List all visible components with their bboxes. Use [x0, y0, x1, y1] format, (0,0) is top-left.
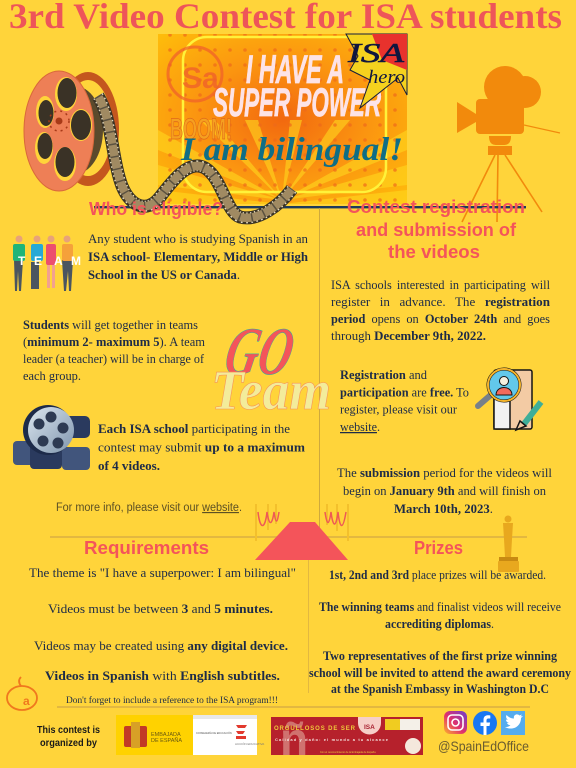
text: requirements: Videos may be created using any digital device.	[34, 638, 288, 653]
logo: embassy of Spain: ACCIÓN EDUCATIVA	[235, 741, 264, 746]
banner headline: SUPER POWER	[213, 81, 381, 125]
text: prizes: The winning teams and finalist videos will receive	[319, 600, 561, 614]
text: requirements: Videos in Spanish with English subtitles.	[45, 668, 280, 683]
logo: proud to be ISA	[271, 713, 423, 765]
text: prizes: 1st, 2nd and 3rd place prizes will be awarded.	[329, 568, 546, 582]
banner headline	[213, 48, 381, 125]
heading: requirements: Requirements	[84, 537, 209, 558]
text: organizers	[37, 725, 100, 749]
banner headline: I HAVE A	[246, 48, 344, 92]
text: teams: (minimum 2- maximum 5). A team	[23, 335, 205, 349]
text: registration period: register in advance. The registration	[331, 295, 550, 309]
banner subtitle: I am bilingual!	[180, 132, 403, 168]
text: submission limit	[98, 421, 305, 473]
heading: contest registration	[347, 196, 525, 262]
text: requirements: The theme is "I have a superpower: I am bilingual"	[29, 565, 296, 580]
text: more info: For more info, please visit our website.	[56, 502, 242, 514]
icon: team: T	[18, 254, 26, 268]
divider: column	[319, 208, 320, 537]
heading: contest registration: Contest registration	[347, 196, 525, 217]
text: submission limit: of 4 videos.	[98, 458, 160, 473]
ISA hero badge	[346, 34, 407, 108]
text: prizes: Two representatives of the first prize winning	[323, 649, 558, 663]
text: requirements	[29, 565, 296, 683]
icon: ISA apple logo: a	[23, 694, 30, 708]
text: prizes	[309, 568, 572, 696]
text: submission limit: contest may submit up to a maximum	[98, 440, 305, 454]
text: prizes: at the Spanish Embassy in Washington D.C	[331, 682, 549, 696]
text: prizes: school will be invited to attend the award ceremony	[309, 666, 572, 680]
text: registration period: period opens on October 24th and goes	[331, 312, 550, 326]
ISA hero badge: ISA	[347, 38, 405, 68]
text: eligibility: ISA school- Elementary, Middle or High	[88, 249, 309, 264]
icon: instagram	[444, 711, 467, 734]
text: social handle: @SpainEdOffice	[438, 738, 529, 754]
divider: lower column	[308, 560, 309, 693]
boom: BOOM!	[170, 113, 232, 146]
logo: proud to be ISA: ISA	[364, 724, 375, 731]
text: teams	[23, 318, 205, 383]
text: eligibility: Any student who is studying Spanish in an	[88, 231, 308, 246]
text: free registration: website.	[340, 420, 380, 434]
camera icon	[457, 66, 560, 222]
logo: embassy of Spain: CONSEJERÍA DE EDUCACIÓN	[196, 732, 232, 735]
divider: footer	[57, 706, 530, 708]
logo: embassy of Spain: EMBAJADA	[151, 732, 181, 738]
icon: team: E	[34, 254, 42, 268]
icon: team	[13, 236, 81, 291]
text: submission period: begin on January 9th and will finish on	[343, 484, 547, 498]
text: teams: leader (a teacher) will be in charge of	[23, 352, 205, 366]
text: registration period	[331, 278, 551, 343]
divider: top	[94, 206, 526, 208]
divider: lower sections	[50, 536, 527, 538]
icon: team: A	[54, 254, 63, 268]
text: prizes: accrediting diplomas.	[385, 617, 494, 631]
text: requirements: Videos must be between 3 and 5 minutes.	[48, 601, 273, 616]
icon: magnifier and form	[478, 369, 541, 430]
text: submission limit: Each ISA school participating in the	[98, 421, 290, 436]
text: free registration: participation are free. To	[340, 386, 469, 400]
text: teams: Students will get together in teams	[23, 318, 198, 332]
icon: oscar statue	[498, 516, 519, 572]
icon: twitter	[501, 711, 525, 735]
ISA logo watermark	[168, 47, 222, 101]
banner: I have a super power	[158, 34, 407, 204]
logo: proud to be ISA: ORGULLOSOS DE SER	[274, 726, 356, 732]
logo: embassy of Spain: DE ESPAÑA	[151, 737, 182, 744]
text: teams: each group.	[23, 369, 81, 383]
text: eligibility	[88, 231, 309, 282]
text: free registration: Registration and	[340, 368, 428, 382]
text: submission period: March 10th, 2023.	[394, 502, 493, 516]
text: free registration: register, please visit our	[340, 402, 458, 416]
go team lettering: Team	[211, 360, 331, 422]
logo: proud to be ISA: ñ	[280, 713, 308, 765]
go team lettering: GO	[219, 314, 301, 389]
ISA logo watermark: Sa	[182, 62, 219, 95]
icon: film reels	[13, 405, 90, 470]
text: free registration	[340, 368, 469, 434]
red carpet with stanchions	[255, 504, 348, 560]
text: organizers: This contest is	[37, 725, 100, 736]
text: eligibility: School in the US or Canada.	[88, 267, 240, 282]
heading: who is eligible: Who is eligible?	[89, 198, 223, 219]
text: registration period: through December 9th, 2022.	[331, 329, 486, 343]
logo: embassy of Spain	[116, 715, 264, 755]
text: reminder: Don't forget to include a reference to the ISA program!!!	[66, 695, 278, 706]
film strip	[98, 96, 292, 218]
heading: contest registration: the videos	[388, 241, 480, 262]
text: registration period: ISA schools interested in participating will	[331, 278, 551, 292]
icon: team: M	[71, 254, 81, 268]
ISA hero badge: hero	[368, 67, 405, 88]
text: organizers: organized by	[40, 738, 97, 749]
go team lettering	[211, 314, 331, 422]
icon: ISA apple logo	[7, 677, 37, 710]
heading: contest registration: and submission of	[356, 219, 517, 240]
icon: facebook	[473, 711, 497, 735]
film reel with strip	[24, 71, 292, 218]
text: submission period	[337, 466, 553, 516]
logo: proud to be ISA: Con el reconocimiento de la Embajada de España	[320, 751, 376, 754]
text: submission period: The submission period for the videos will	[337, 466, 553, 480]
heading: prizes: Prizes	[414, 537, 463, 558]
logo: proud to be ISA: Calidad y daño: el mundo a tu alcance	[275, 737, 389, 742]
